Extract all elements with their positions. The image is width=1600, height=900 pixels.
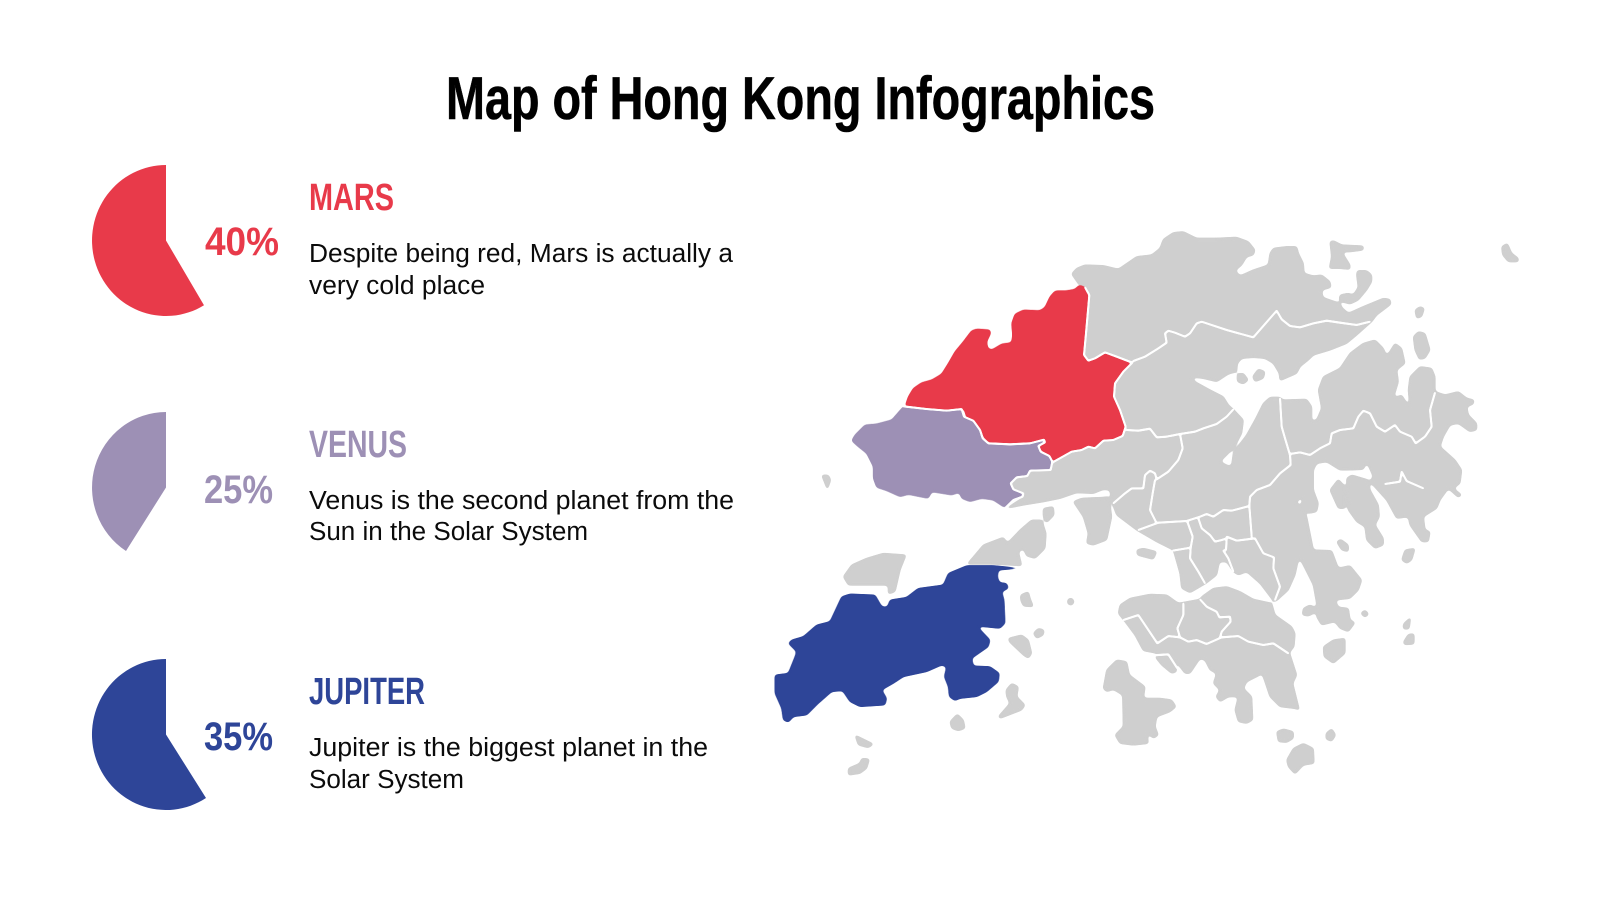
- district boundaries: [903, 287, 1435, 668]
- pie chart: jupiter 35%: [92, 659, 206, 810]
- text: venus description: Venus is the second planet from the: [309, 487, 734, 515]
- pie chart: mars 40%: [92, 165, 204, 316]
- panel: jupiter: [92, 659, 708, 810]
- percentage: jupiter: 35%: [204, 715, 273, 759]
- pie chart: venus 25%: [92, 412, 166, 551]
- title: Map of Hong Kong Infographics: [446, 65, 1155, 132]
- heading: jupiter: JUPITER: [309, 671, 425, 713]
- district: venus (purple): [852, 407, 1052, 507]
- text: mars description: Despite being red, Mars is actually a: [309, 240, 734, 268]
- panel: venus: [92, 412, 734, 551]
- heading: venus: VENUS: [309, 424, 407, 466]
- district: mars (red): [905, 285, 1132, 462]
- map of Hong Kong: [775, 232, 1518, 775]
- text: venus description: Sun in the Solar System: [309, 518, 588, 546]
- grey districts and islands: [822, 232, 1518, 775]
- text: mars description: very cold place: [309, 272, 485, 300]
- heading: mars: MARS: [309, 177, 394, 219]
- percentage: mars: 40%: [205, 220, 279, 264]
- panel: mars: [92, 165, 734, 316]
- district: jupiter (blue): [775, 566, 1022, 722]
- percentage: venus: 25%: [204, 468, 273, 512]
- text: jupiter description: Jupiter is the biggest planet in the: [309, 734, 708, 762]
- text: jupiter description: Solar System: [309, 766, 464, 794]
